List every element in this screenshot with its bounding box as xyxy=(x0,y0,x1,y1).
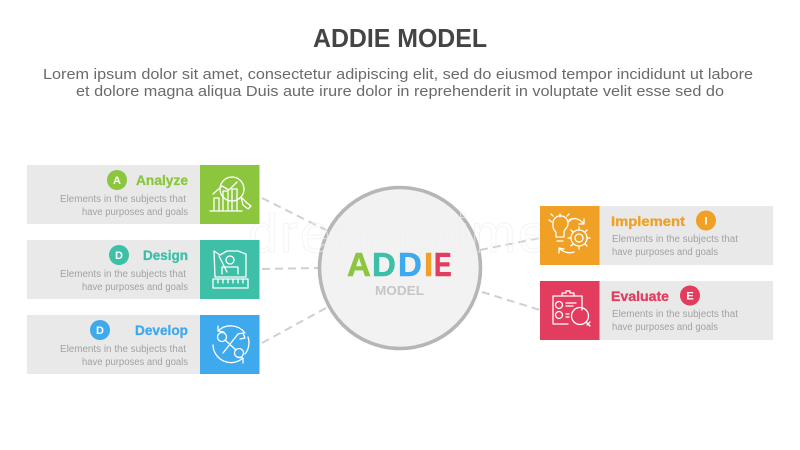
text: design description: Elements in the subjects that xyxy=(60,269,186,280)
badge: D xyxy=(90,320,110,340)
badge: D: D xyxy=(115,250,123,262)
panel: evaluate xyxy=(540,281,773,340)
watermark: dreamstime xyxy=(248,204,548,264)
panel: develop xyxy=(27,315,260,374)
intro text: Lorem ipsum dolor sit amet, consectetur adipiscing elit, sed do eiusmod tempor incididunt ut labore xyxy=(43,66,753,83)
text: design description: have purposes and goals xyxy=(82,282,188,293)
text: evaluate description: Elements in the subjects that xyxy=(612,309,738,320)
text: evaluate description xyxy=(612,309,738,333)
ADDIE wordmark: D xyxy=(372,246,396,283)
ADDIE wordmark xyxy=(347,246,452,284)
icon: chart with magnifier xyxy=(210,177,251,211)
text: analyze description: Elements in the subjects that xyxy=(60,194,186,205)
central circle xyxy=(320,188,480,348)
text: develop description xyxy=(60,344,188,368)
text: develop description: Elements in the subjects that xyxy=(60,344,186,355)
ADDIE wordmark: A xyxy=(347,246,371,283)
model label: MODEL xyxy=(375,283,424,298)
text: implement description: have purposes and goals xyxy=(612,247,718,258)
intro text: et dolore magna aliqua Duis aute irure dolor in reprehenderit in voluptate velit esse sed do xyxy=(76,83,724,100)
text: analyze description xyxy=(60,194,188,218)
text: implement description: Elements in the subjects that xyxy=(612,234,738,245)
badge: D xyxy=(109,245,129,265)
title: ADDIE MODEL xyxy=(313,23,487,53)
text: develop description: have purposes and goals xyxy=(82,357,188,368)
text: evaluate description: have purposes and goals xyxy=(612,322,718,333)
icon: clipboard with magnifier xyxy=(553,291,590,326)
heading: analyze: Analyze xyxy=(136,173,188,188)
badge: I xyxy=(696,210,716,230)
heading: evaluate: Evaluate xyxy=(611,289,670,304)
panel: implement xyxy=(540,206,773,265)
dashed connectors xyxy=(262,198,540,343)
badge: D: D xyxy=(96,325,104,337)
badge: A: A xyxy=(113,175,121,187)
intro text xyxy=(43,66,753,100)
panel: design xyxy=(27,240,260,299)
text: analyze description: have purposes and goals xyxy=(82,207,188,218)
panel: analyze xyxy=(27,165,260,224)
badge: I: I xyxy=(704,216,708,228)
badge: E xyxy=(680,286,700,306)
text: implement description xyxy=(612,234,738,258)
icon: blueprint and ruler xyxy=(213,251,248,288)
badge: A xyxy=(107,170,127,190)
heading: design: Design xyxy=(143,248,188,263)
icon: crossed tools with cycle arrows xyxy=(213,326,249,363)
badge: E: E xyxy=(686,290,694,302)
heading: implement: Implement xyxy=(611,214,686,229)
icon: lightbulb and gear xyxy=(549,214,590,253)
ADDIE wordmark: D xyxy=(398,246,422,283)
ADDIE wordmark: E xyxy=(434,247,452,284)
text: design description xyxy=(60,269,188,293)
ADDIE wordmark: I xyxy=(424,246,433,283)
heading: develop: Develop xyxy=(135,323,188,338)
